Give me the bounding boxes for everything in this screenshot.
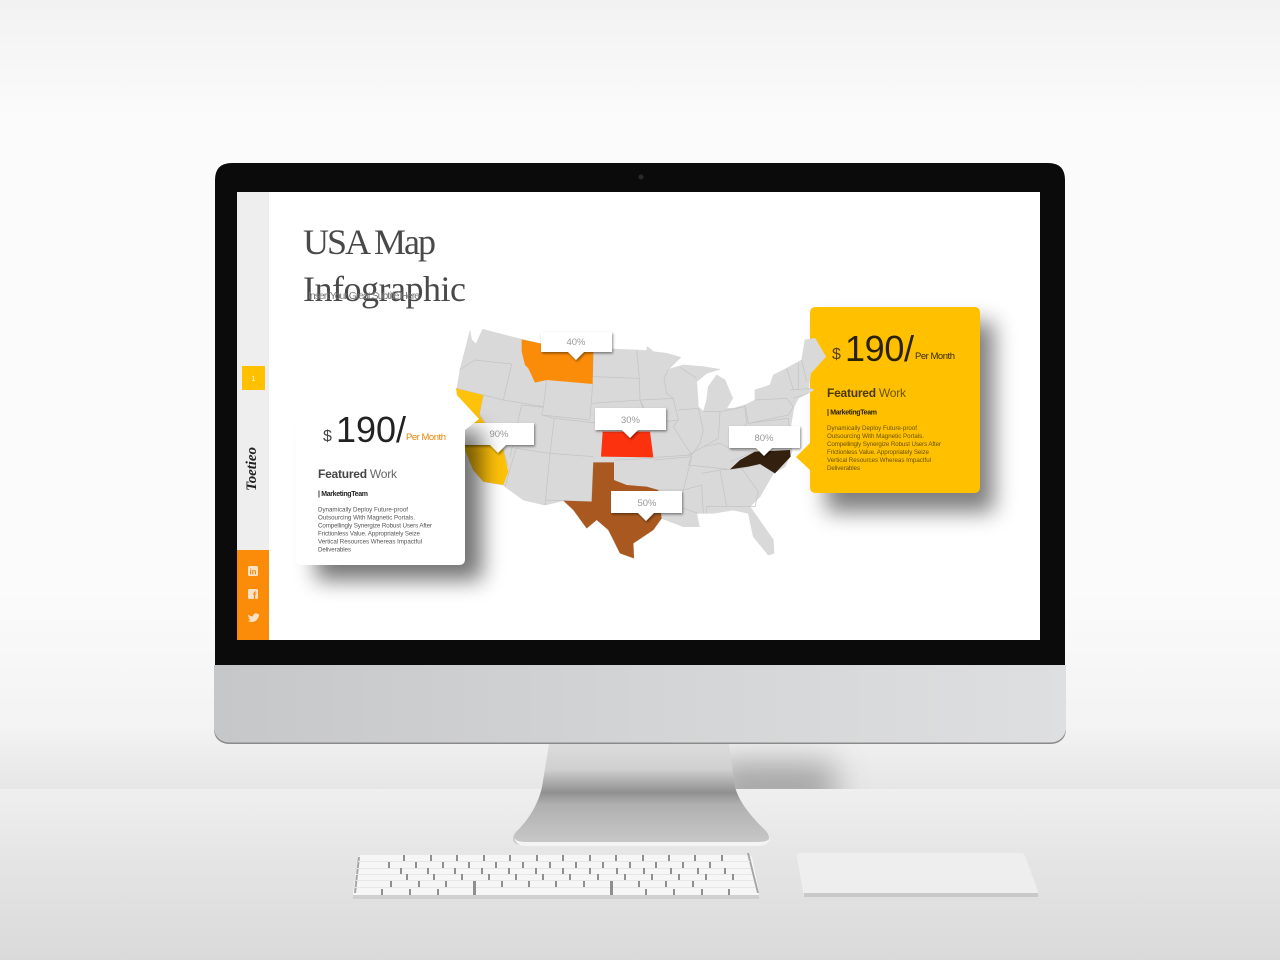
subtitle: Insert Your Great Subtitle Here	[308, 290, 420, 302]
camera	[638, 174, 644, 180]
page number badge: 1	[252, 376, 256, 383]
body text: Deliverables	[318, 546, 351, 554]
subheading: | MarketingTeam	[827, 410, 877, 416]
monitor	[214, 163, 1066, 744]
icon: linkedin: in	[249, 568, 257, 576]
state: california	[456, 388, 508, 485]
panel: right price card	[796, 307, 994, 512]
body text: Frictionless Value. Appropriately Seize	[318, 530, 421, 538]
left sidebar	[237, 192, 269, 640]
price: $	[832, 346, 841, 363]
keyboard	[353, 853, 759, 899]
callout: 50%	[611, 491, 682, 521]
title: Infographic	[303, 269, 466, 309]
heading: Featured Work	[827, 386, 907, 400]
state: montana	[522, 339, 593, 384]
price: Per Month	[915, 351, 955, 362]
monitor bezel	[215, 163, 1065, 666]
callout: 40%	[541, 332, 612, 360]
monitor stand	[513, 744, 770, 846]
subheading: | MarketingTeam	[318, 491, 368, 498]
card shadow	[826, 322, 994, 512]
callout: 90%: 90%	[489, 429, 509, 440]
card body	[796, 307, 980, 493]
body text: Deliverables	[827, 465, 860, 472]
keyboard body	[353, 855, 759, 899]
callout: 80%	[729, 426, 800, 456]
body text: Frictionless Value. Appropriately Seize	[827, 449, 930, 456]
brand name: Toetieo	[244, 447, 260, 491]
monitor chin	[214, 665, 1066, 744]
right card text	[827, 328, 955, 472]
price: 190/	[845, 328, 914, 369]
body text: Outsourcing With Magnetic Portals.	[827, 433, 924, 440]
body text	[827, 425, 941, 472]
callout: 30%	[595, 408, 666, 438]
title: USA Map	[303, 222, 436, 262]
body text: Compellingly Synergize Robust Users After	[827, 441, 941, 448]
callout: 30%: 30%	[621, 415, 641, 426]
body text	[318, 506, 432, 554]
price	[832, 328, 955, 369]
body text: Dynamically Deploy Future-proof	[318, 506, 408, 514]
page number badge	[242, 366, 265, 390]
panel: left price card	[296, 393, 482, 580]
price: $	[323, 428, 332, 445]
price	[323, 409, 446, 450]
trackpad	[797, 853, 1038, 897]
body text: Vertical Resources Whereas Impactful	[318, 538, 422, 546]
key gaps	[381, 855, 734, 895]
callout: 50%: 50%	[637, 498, 657, 509]
map base	[457, 329, 826, 558]
body text: Vertical Resources Whereas Impactful	[827, 457, 931, 464]
key rows	[355, 861, 755, 888]
state: north carolina	[730, 450, 791, 473]
callout: 90%	[450, 423, 534, 453]
card shadow	[316, 430, 482, 580]
state borders	[456, 348, 812, 513]
icon: facebook: f	[253, 591, 257, 602]
title	[303, 222, 466, 309]
usa map	[456, 329, 826, 558]
price: 190/	[336, 409, 406, 450]
social panel	[237, 550, 269, 640]
heading: Featured Work	[318, 467, 398, 481]
body text: Outsourcing With Magnetic Portals.	[318, 514, 415, 522]
card body	[296, 393, 479, 565]
price: Per Month	[406, 432, 446, 443]
icon: twitter	[248, 613, 259, 622]
body text: Compellingly Synergize Robust Users After	[318, 522, 432, 530]
callout: 80%: 80%	[754, 433, 774, 444]
state: texas	[563, 462, 662, 558]
screen	[237, 192, 1040, 640]
callout: 40%: 40%	[566, 337, 586, 348]
state: kansas	[601, 432, 653, 457]
body text: Dynamically Deploy Future-proof	[827, 425, 917, 432]
